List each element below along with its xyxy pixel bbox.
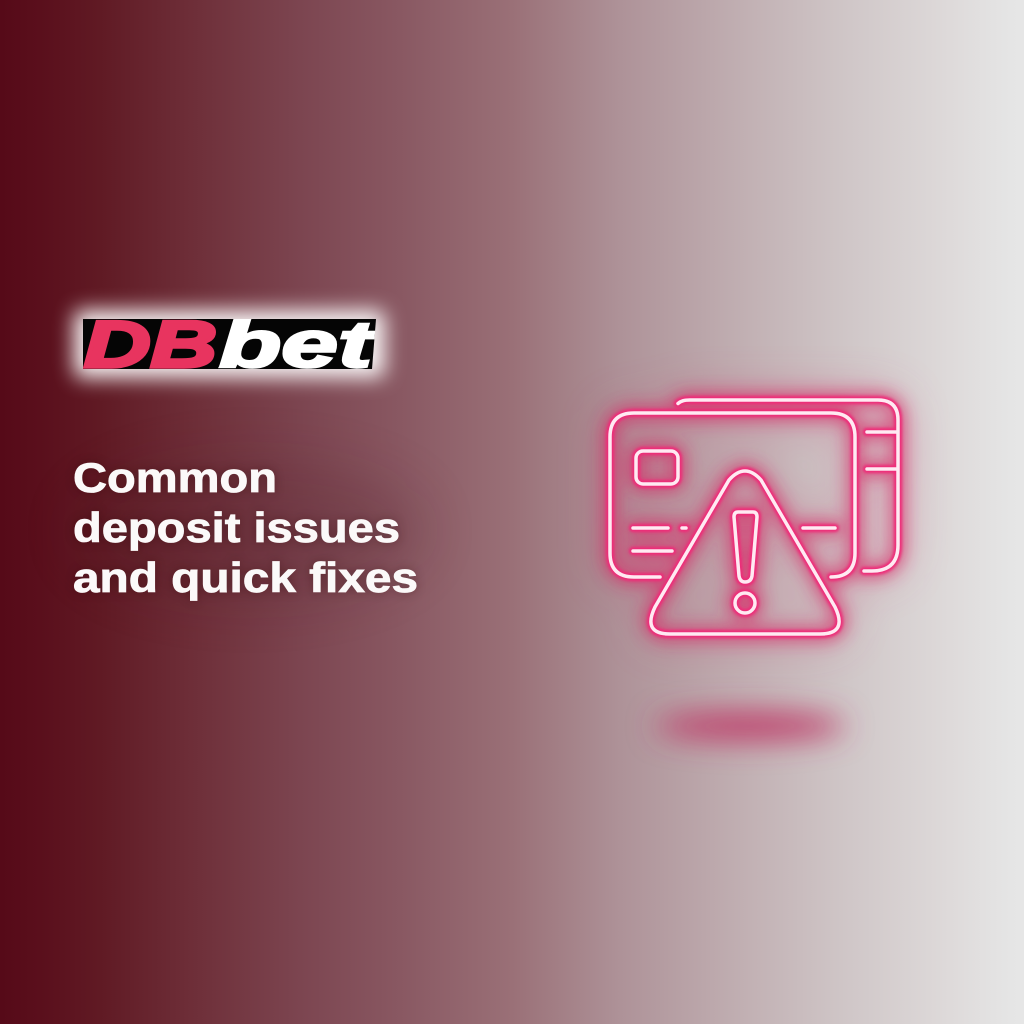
title: and quick fixes <box>73 554 418 601</box>
icon shadow <box>655 712 845 740</box>
icon: credit cards with warning triangle <box>610 400 898 634</box>
title: Common <box>73 454 277 501</box>
title: deposit issues <box>73 504 400 551</box>
title: and quick fixes <box>73 554 418 601</box>
logo: DBbet: bet <box>219 307 377 381</box>
logo: DBbet: DB <box>84 307 217 381</box>
title: Common <box>73 454 277 501</box>
soft shade behind title <box>75 460 425 600</box>
title <box>73 454 418 601</box>
title: deposit issues <box>73 504 400 551</box>
logo: DBbet <box>74 307 385 381</box>
